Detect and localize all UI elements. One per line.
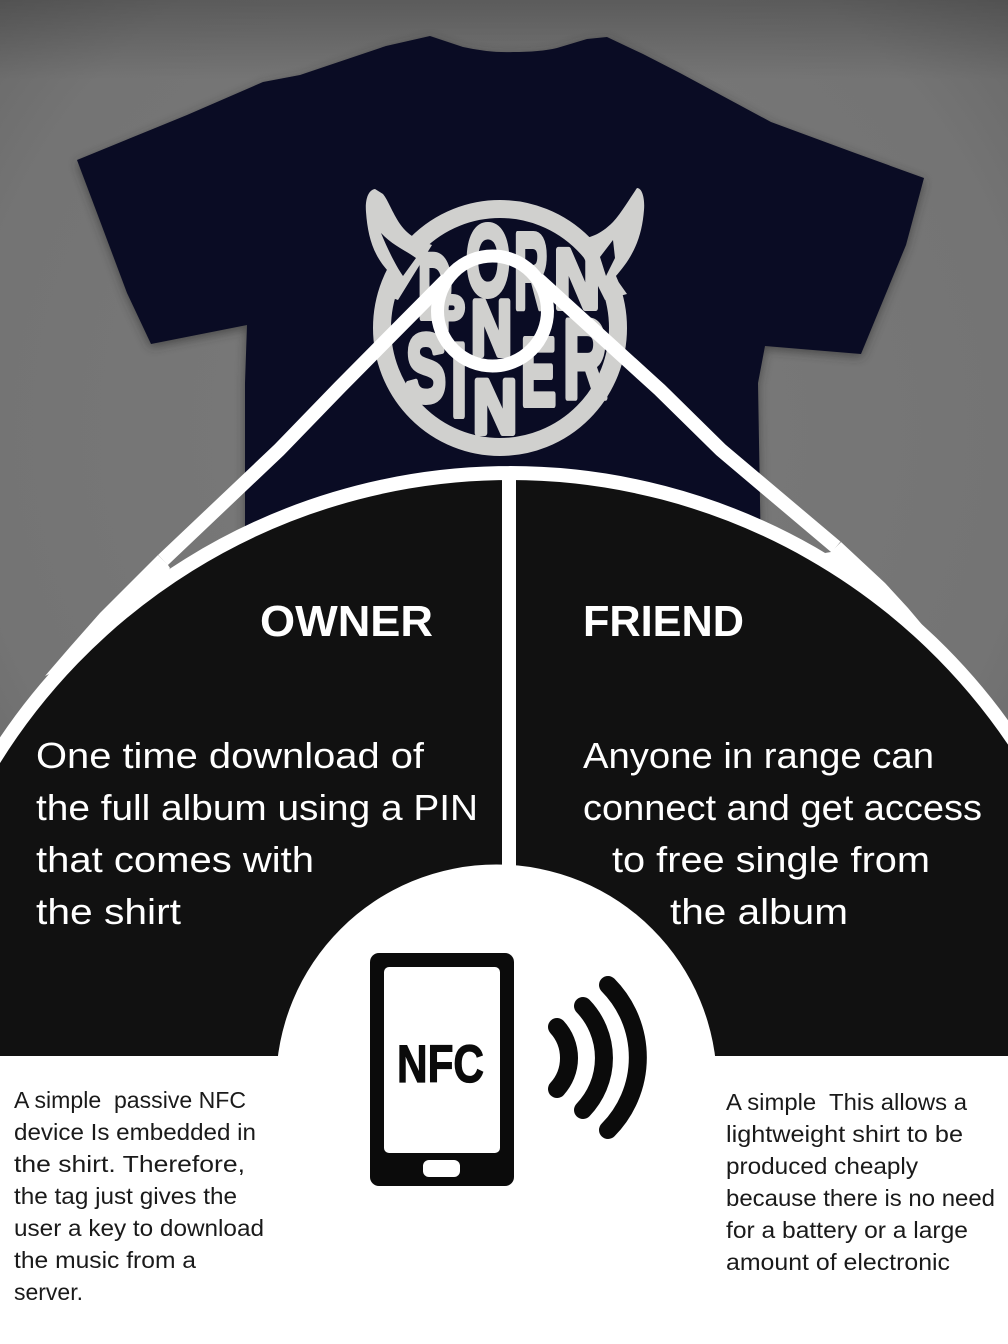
shirt logo: Born Sinner: N: [554, 232, 600, 326]
owner description: the shirt: [36, 891, 181, 932]
white NFC dome: [276, 864, 717, 1306]
black semicircular panel with white outline: [0, 473, 1008, 1056]
shirt logo: Born Sinner: E: [521, 319, 556, 426]
shirt logo: Born Sinner: D: [418, 236, 452, 338]
right note: for a battery or a large: [726, 1217, 968, 1243]
right note: A simple This allows a: [726, 1089, 967, 1115]
icon: NFC phone: [370, 953, 514, 1186]
photo background: [0, 0, 1008, 1060]
left note: [14, 1087, 264, 1305]
shirt logo: Born Sinner: N: [471, 284, 512, 372]
heading: friend: FRIEND: [583, 597, 744, 646]
friend description: Anyone in range can: [583, 735, 934, 776]
shirt logo: Born Sinner: I: [451, 323, 467, 439]
shirt logo: Born Sinner: R: [563, 297, 607, 422]
owner description: the full album using a PIN: [36, 787, 478, 828]
friend description: the album: [670, 891, 848, 932]
friend description: connect and get access: [583, 787, 982, 828]
left note: server.: [14, 1279, 83, 1305]
owner description: that comes with: [36, 839, 314, 880]
magnifier ring and connector lines: [45, 256, 935, 676]
friend description: to free single from: [612, 839, 930, 880]
right note: because there is no need: [726, 1185, 995, 1211]
shirt logo: Born Sinner: O: [466, 205, 510, 317]
left note: user a key to download: [14, 1215, 264, 1241]
shirt logo: Born Sinner: S: [406, 315, 446, 422]
left note: the tag just gives the: [14, 1183, 237, 1209]
icon: wireless signal waves: [557, 985, 638, 1130]
shirt logo: Born Sinner: P: [438, 288, 464, 341]
right note: lightweight shirt to be: [726, 1121, 963, 1147]
left note: device Is embedded in: [14, 1119, 256, 1145]
icon: NFC phone: NFC: [397, 1035, 484, 1094]
heading: owner: OWNER: [260, 597, 433, 646]
owner description: One time download of: [36, 735, 425, 776]
t-shirt photo: [77, 36, 924, 563]
shirt logo: Born Sinner: R: [514, 210, 548, 331]
left note: A simple passive NFC: [14, 1087, 246, 1113]
white panel under the semicircle: [0, 1056, 1008, 1344]
shirt logo: Born Sinner: N: [473, 365, 517, 450]
friend description: [583, 735, 982, 932]
left note: the shirt. Therefore,: [14, 1151, 245, 1177]
right note: produced cheaply: [726, 1153, 919, 1179]
left note: the music from a: [14, 1247, 196, 1273]
shirt logo: Born Sinner: [366, 188, 644, 450]
owner description: [36, 735, 478, 932]
right note: amount of electronic: [726, 1249, 950, 1275]
right note: [726, 1089, 995, 1275]
